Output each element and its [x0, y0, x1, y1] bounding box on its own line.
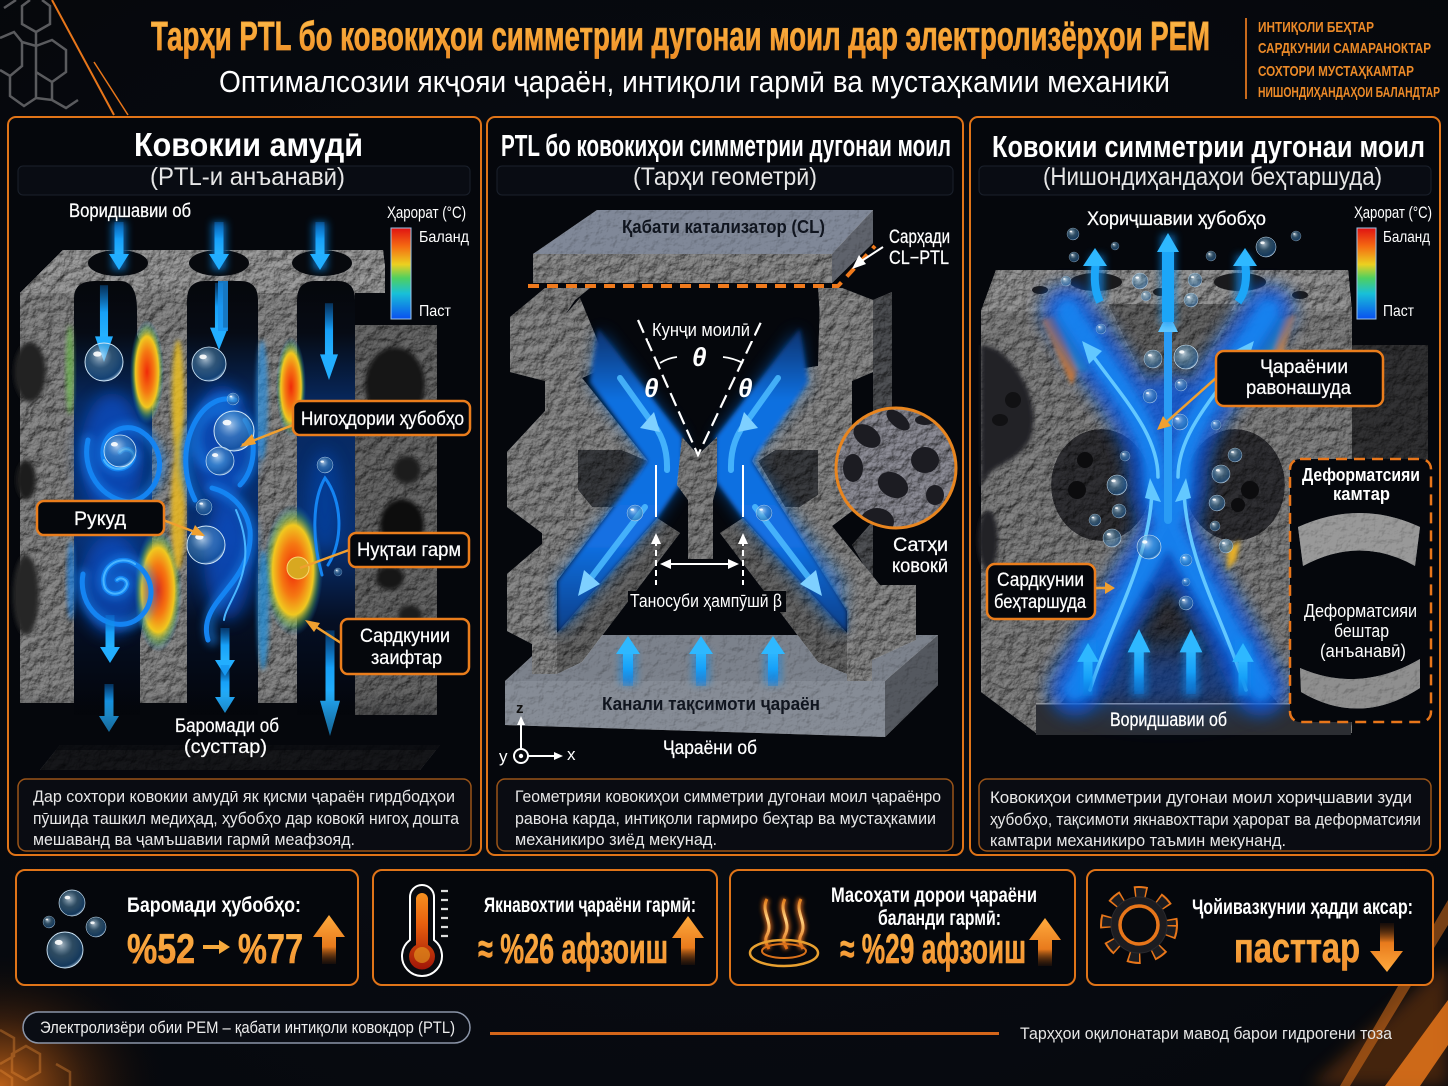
- caption: vertical pore: Дар сохтори ковокии амудӣ як қисми ҷараён гирдбодҳои: [33, 787, 455, 806]
- arrow down: [1370, 923, 1403, 972]
- channel glow: [80, 385, 341, 635]
- caption: geometry: [497, 779, 953, 851]
- temperature legend: Паст: [419, 303, 452, 320]
- heading: vertical pore: [18, 126, 470, 195]
- bubbles: [1061, 228, 1301, 610]
- value: %52: [127, 925, 195, 972]
- icon: flames: [750, 899, 818, 966]
- callout: guided flow: [1157, 351, 1383, 430]
- axes: z: [516, 700, 524, 717]
- bottom up arrows: [616, 636, 785, 686]
- diagram: vertical channel block: [13, 222, 475, 770]
- top wedge: [1108, 304, 1235, 429]
- temperature legend: [1354, 203, 1432, 320]
- card: high heat flow area: Масоҳати дорои ҷараёни: [831, 884, 1037, 907]
- heading: geometry: [497, 128, 953, 195]
- value: [127, 925, 303, 972]
- water flow bands: [558, 328, 847, 633]
- inset: deformation comparison: Деформатсияи: [1302, 465, 1420, 485]
- caption: vertical pore: пӯшида ташкил медиҳад, ҳубобҳо дар ковокӣ нигоҳ дошта: [33, 809, 459, 828]
- axes: x: [567, 745, 576, 764]
- heading: vertical pore: (PTL-и анъанавӣ): [150, 163, 345, 191]
- key benefits list: ИНТИҚОЛИ БЕҲТАР: [1258, 19, 1374, 36]
- label: water inlet: Воридшавии об: [1110, 710, 1227, 731]
- label: water inlet: Воридшавии об: [69, 201, 191, 222]
- vortices: [82, 399, 339, 640]
- card: high heat flow area: ≈ %29 афзоиш: [840, 925, 1026, 972]
- footer pill: [23, 1012, 470, 1043]
- water flow X: [1068, 311, 1268, 690]
- overlap ratio annotation: Таносуби ҳампӯшӣ β: [630, 591, 782, 611]
- callout: guided flow: равонашуда: [1246, 378, 1351, 399]
- card: max displacement: [1087, 870, 1433, 985]
- footer divider: [490, 1032, 999, 1035]
- temperature legend: Ҳарорат (°C): [387, 203, 466, 222]
- angle annotation: θ: [644, 373, 658, 403]
- temperature legend: [385, 203, 475, 325]
- icon: gear: [1107, 893, 1171, 957]
- flow arrow heads: [1082, 312, 1254, 502]
- inset: deformation comparison: Деформатсияи: [1304, 601, 1417, 621]
- card: thermal uniformity: [373, 870, 717, 985]
- heat fringes: [1042, 311, 1296, 572]
- temperature legend: Баланд: [1383, 229, 1431, 246]
- catalyst layer plate: Қабати катализатор (CL): [622, 217, 825, 237]
- top holes: [1032, 273, 1308, 299]
- top exit arrows: [1083, 233, 1257, 325]
- label: water outlet: [175, 716, 279, 758]
- label: water outlet: (сусттар): [184, 737, 267, 758]
- angle annotation: [638, 320, 762, 455]
- inset: deformation comparison: камтар: [1333, 484, 1390, 504]
- heading: vertical pore: Ковокии амудӣ: [134, 126, 363, 163]
- angle annotation: Кунҷи моилӣ: [652, 320, 750, 340]
- side pockets: [1051, 429, 1285, 541]
- inset: deformation comparison: (анъанавӣ): [1320, 641, 1406, 661]
- callout: stagnation: [37, 501, 205, 536]
- label: pore surface: [892, 535, 948, 577]
- card: thermal uniformity: Якнавохтии ҷараёни гармӣ:: [484, 894, 696, 917]
- icon: bubbles: [43, 890, 106, 968]
- inset: deformation comparison: [1290, 459, 1431, 722]
- water flow arrows: [95, 222, 340, 736]
- inlet arrows: [1077, 629, 1254, 696]
- heading: performance: [979, 129, 1431, 195]
- footer pill: Электролизёри обии PEM – қабати интиқоли ковокдор (PTL): [40, 1018, 455, 1037]
- lower cavity: [1061, 526, 1278, 703]
- arrow up: [1029, 918, 1061, 966]
- caption: geometry: механикиро зиёд мекунад.: [515, 830, 717, 849]
- callout: improved cooling: беҳтаршуда: [994, 592, 1086, 613]
- label: CL-PTL boundary: CL−PTL: [889, 248, 949, 269]
- arrow up: [672, 916, 704, 965]
- diagram: porous X structure: [507, 288, 916, 681]
- card: bubble removal rate: [16, 870, 358, 985]
- label: CL-PTL boundary: [852, 227, 950, 269]
- label: CL-PTL boundary: Сарҳади: [889, 227, 950, 248]
- key benefits list: [1245, 18, 1440, 101]
- inlet holes: [88, 250, 352, 276]
- caption: geometry: равона карда, интиқоли гармиро беҳтар ва мустаҳкамии: [515, 809, 936, 828]
- overlap ratio annotation: [628, 465, 786, 612]
- icon: thermometer: [402, 885, 448, 976]
- low deformation block: [1298, 513, 1420, 566]
- inlet bar: [1036, 703, 1351, 735]
- axes: [499, 700, 576, 766]
- panel: geometry: [487, 117, 963, 855]
- diagram: dual inclined channel block: [978, 228, 1428, 735]
- side hollows: [978, 345, 1034, 570]
- high deformation block: [1300, 659, 1420, 709]
- temperature legend: Паст: [1383, 303, 1415, 320]
- temperature legend: Баланд: [419, 229, 470, 246]
- caption: vertical pore: мешаванд ва ҷамъшавии гармӣ меафзояд.: [33, 830, 355, 849]
- callout: hot spot: [300, 533, 469, 568]
- callout: improved cooling: Сардкунии: [997, 570, 1084, 591]
- callout: bubble retention: Нигоҳдории ҳубобҳо: [301, 409, 464, 430]
- card: high heat flow area: [730, 870, 1075, 985]
- caption: performance: камтари механикиро таъмин мекунанд.: [990, 831, 1286, 850]
- callout: hot spot: Нуқтаи гарм: [357, 540, 461, 561]
- heading: performance: (Нишондиҳандаҳои беҳтаршуда): [1043, 163, 1382, 191]
- diagram: bottom distribution plate: [505, 635, 938, 737]
- arrow up: [313, 915, 345, 964]
- callout: bubble retention: [240, 401, 470, 447]
- label: water flow: Ҷараёни об: [663, 738, 757, 759]
- callout: weak cooling: [305, 619, 469, 674]
- angle annotation: θ: [692, 342, 706, 372]
- caption: geometry: Геометрияи ковокиҳои симметрии дугонаи моил ҷараёнро: [515, 787, 941, 806]
- callout: improved cooling: [987, 564, 1115, 619]
- CL-PTL dashed boundary: [528, 246, 875, 286]
- callout: guided flow: Ҷараёнии: [1260, 357, 1348, 378]
- label: distribution channel: Канали тақсимоти ҷараён: [602, 694, 820, 714]
- magnified pore surface: [836, 406, 956, 536]
- catalyst layer plate: [533, 210, 873, 283]
- callout: weak cooling: Сардкунии: [360, 626, 450, 647]
- caption: performance: [979, 779, 1431, 851]
- panel: vertical pore: [8, 117, 481, 855]
- card: max displacement: пасттар: [1234, 924, 1360, 971]
- bubbles: [85, 343, 342, 579]
- card: thermal uniformity: ≈ %26 афзоиш: [478, 925, 668, 972]
- label: pore surface: ковокӣ: [892, 556, 948, 577]
- callout: weak cooling: заифтар: [371, 648, 442, 669]
- subtitle: Оптималсозии якҷояи ҷараён, интиқоли гармӣ ва мустаҳкамии механикӣ: [219, 64, 1170, 99]
- label: pore surface: Сатҳи: [893, 535, 948, 556]
- value: %77: [238, 925, 303, 972]
- caption: performance: Ковокиҳои симметрии дугонаи моил хориҷшавии зуди: [990, 788, 1412, 807]
- channels: [74, 281, 355, 715]
- caption: vertical pore: [18, 779, 471, 851]
- heading: geometry: (Тарҳи геометрӣ): [633, 163, 817, 191]
- label: water outlet: Баромади об: [175, 716, 279, 737]
- inset: deformation comparison: бештар: [1334, 621, 1389, 641]
- center rib: [677, 437, 717, 559]
- angle annotation: θ: [738, 373, 752, 403]
- callout: stagnation: Рукуд: [74, 509, 126, 530]
- bottom glow: [1068, 650, 1268, 710]
- panel: performance: [970, 117, 1440, 855]
- card: bubble removal rate: Баромади ҳубобҳо:: [127, 894, 301, 917]
- hot spots and heat bands: [66, 320, 323, 670]
- axes: y: [499, 747, 508, 766]
- footer note: Тарҳҳои оқилонатари мавод барои гидрогени тоза: [1020, 1024, 1393, 1043]
- label: bubble removal: Хориҷшавии ҳубобҳо: [1087, 209, 1266, 230]
- card: high heat flow area: баланди гармӣ:: [878, 907, 1001, 930]
- heading: geometry: PTL бо ковокиҳои симметрии дугонаи моил: [501, 128, 951, 163]
